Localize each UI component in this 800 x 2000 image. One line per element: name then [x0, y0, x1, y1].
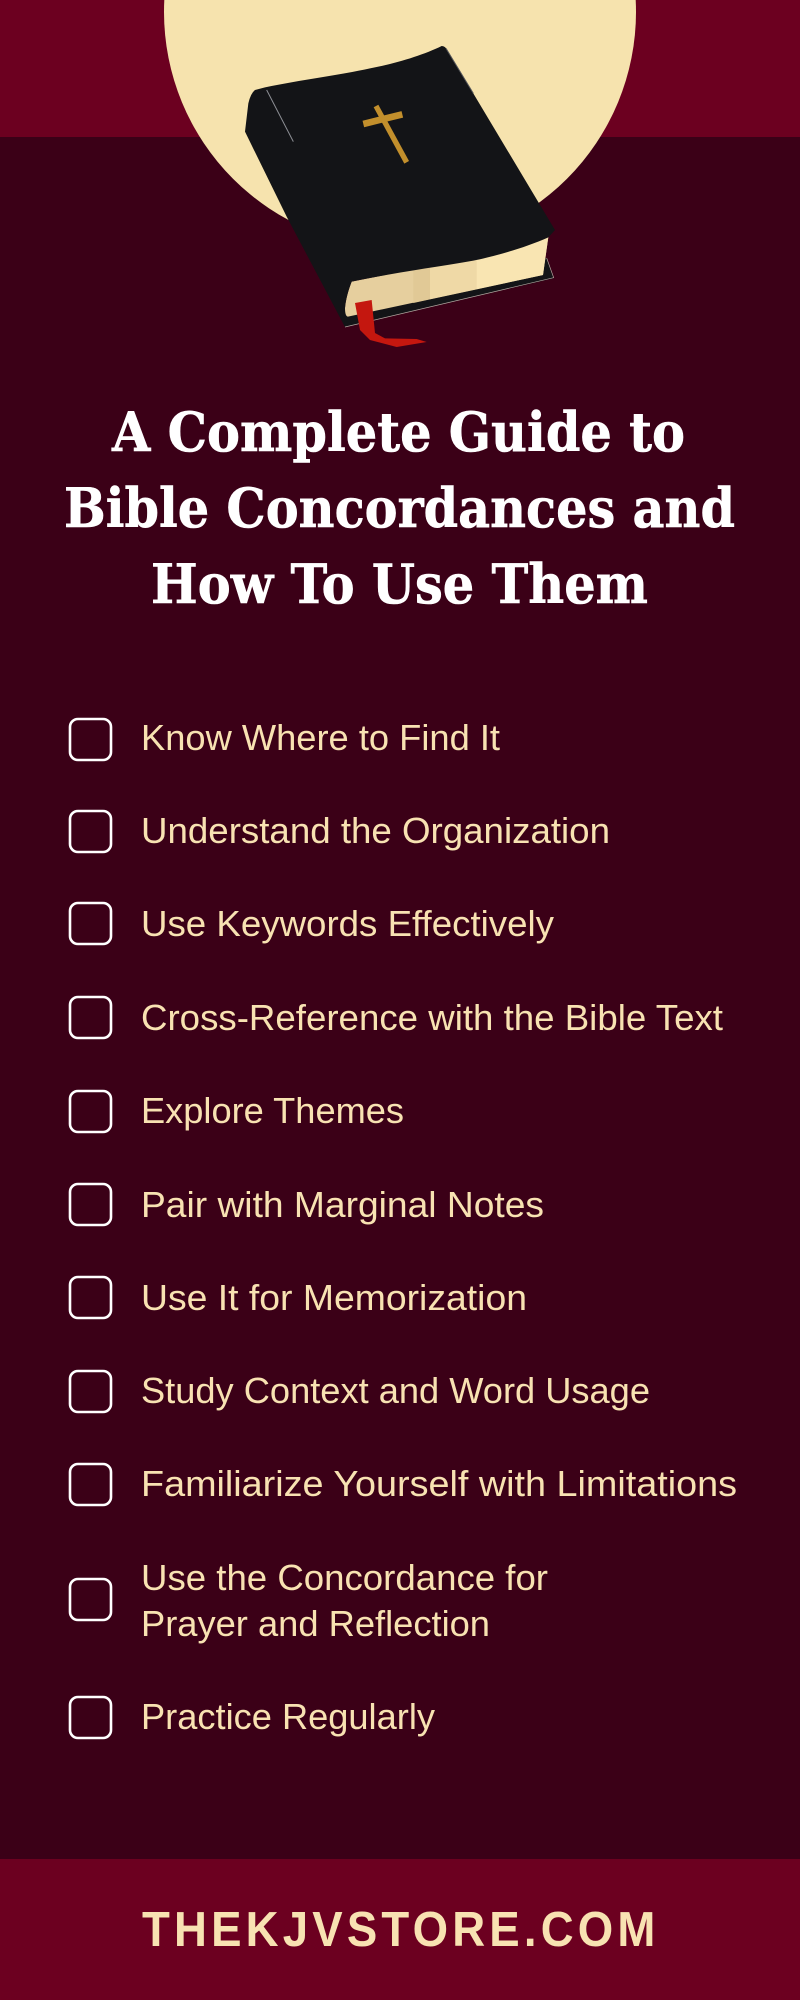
item 4: Cross-Reference with the Bible Text	[141, 997, 723, 1038]
item 5: Explore Themes	[141, 1090, 404, 1131]
footer band	[0, 1859, 800, 2000]
item 8: Study Context and Word Usage	[141, 1370, 650, 1411]
top band	[0, 0, 800, 137]
checklist	[70, 717, 737, 1738]
item 9: Familiarize Yourself with Limitations	[141, 1463, 737, 1504]
footer website: THEKJVSTORE.COM	[142, 1903, 655, 1957]
title: A Complete Guide to	[111, 400, 685, 464]
item 3: Use Keywords Effectively	[141, 903, 554, 944]
item 11: Practice Regularly	[141, 1696, 435, 1737]
item 7: Use It for Memorization	[141, 1277, 527, 1318]
item 10: Use the Concordance for	[141, 1557, 548, 1598]
item 6: Pair with Marginal Notes	[141, 1184, 544, 1225]
item 10	[70, 1557, 548, 1644]
title	[64, 400, 735, 616]
title: How To Use Them	[151, 552, 648, 616]
item 10: Prayer and Reflection	[141, 1603, 490, 1644]
cream circle	[164, 0, 636, 248]
title: Bible Concordances and	[64, 476, 735, 540]
icon: black bible with gold cross and red ribbon	[245, 46, 555, 347]
item 1: Know Where to Find It	[141, 717, 500, 758]
item 2: Understand the Organization	[141, 810, 610, 851]
